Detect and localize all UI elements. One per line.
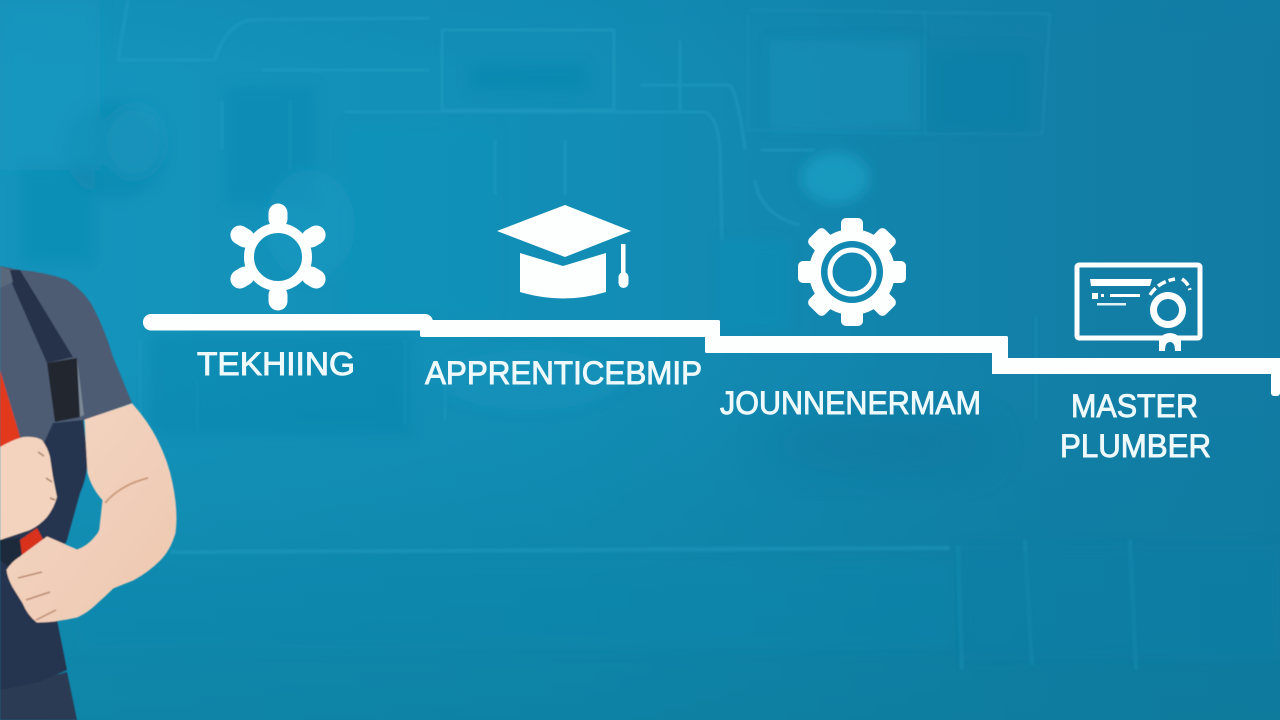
shirt (0, 266, 132, 447)
red wrench (0, 370, 47, 566)
icon: certificate with seal (1077, 265, 1200, 351)
overall strap (6, 270, 73, 363)
strap buckle (47, 358, 80, 422)
faded workshop background illustration (118, 0, 1136, 670)
label: step 4, line 1: MASTER (1071, 388, 1198, 424)
staircase progress line (143, 314, 1280, 396)
step 4: Master Plumber (1060, 265, 1211, 464)
icon: six-spoke gear (240, 213, 316, 301)
plumber figure (0, 266, 176, 720)
soft shadow band and pipes (75, 417, 1280, 660)
upper fist (0, 437, 57, 540)
step 2: Apprenticeship (425, 205, 702, 391)
faded background blobs (0, 0, 1030, 435)
trousers (0, 672, 77, 720)
step 3: Journeyman (720, 218, 981, 421)
icon: graduation cap (497, 205, 631, 298)
label: step 2: APPRENTICEBMIP (425, 355, 702, 391)
label: step 4, line 2: PLUMBER (1060, 428, 1211, 464)
icon: eight-tooth gear (798, 218, 906, 326)
step 1: Training (197, 213, 355, 382)
collar (0, 266, 13, 288)
overalls bib (0, 420, 88, 690)
arm and lower hand (7, 404, 176, 622)
label: step 3: JOUNNENERMAM (720, 385, 981, 421)
label: step 1: TEKHIING (197, 346, 355, 382)
